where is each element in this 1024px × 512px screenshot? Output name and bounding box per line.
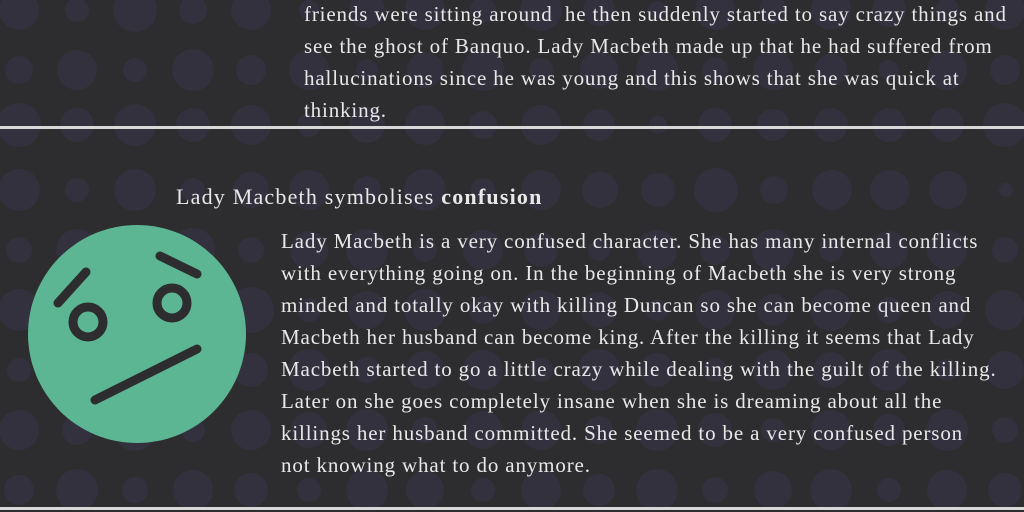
text block: body paragraph: killings her husband committed. She seemed to be a very confused person: [281, 421, 963, 445]
text block: body paragraph: Macbeth her husband can become king. After the killing it seems that Lady: [281, 325, 975, 349]
text block: top paragraph: thinking.: [304, 98, 387, 122]
text block: body paragraph: [281, 229, 997, 477]
icon: confused face: [28, 225, 246, 443]
text block: top paragraph: friends were sitting around he then suddenly started to say crazy things and: [304, 2, 1007, 26]
text block: top paragraph: see the ghost of Banquo. Lady Macbeth made up that he had suffered from: [304, 34, 993, 58]
text block: body paragraph: not knowing what to do anymore.: [281, 453, 591, 477]
heading: Lady Macbeth symbolises confusion: [176, 184, 543, 209]
text block: body paragraph: minded and totally okay with killing Duncan so she can become queen and: [281, 293, 971, 317]
text block: body paragraph: Later on she goes completely insane when she is dreaming about all the: [281, 389, 942, 413]
text block: top paragraph: hallucinations since he was young and this shows that she was quick at: [304, 66, 960, 90]
text block: body paragraph: Macbeth started to go a little crazy while dealing with the guilt of the killing.: [281, 357, 997, 381]
text block: body paragraph: Lady Macbeth is a very confused character. She has many internal conflicts: [281, 229, 978, 253]
text block: top paragraph: [304, 2, 1007, 122]
text block: body paragraph: with everything going on. In the beginning of Macbeth she is very strong: [281, 261, 956, 285]
